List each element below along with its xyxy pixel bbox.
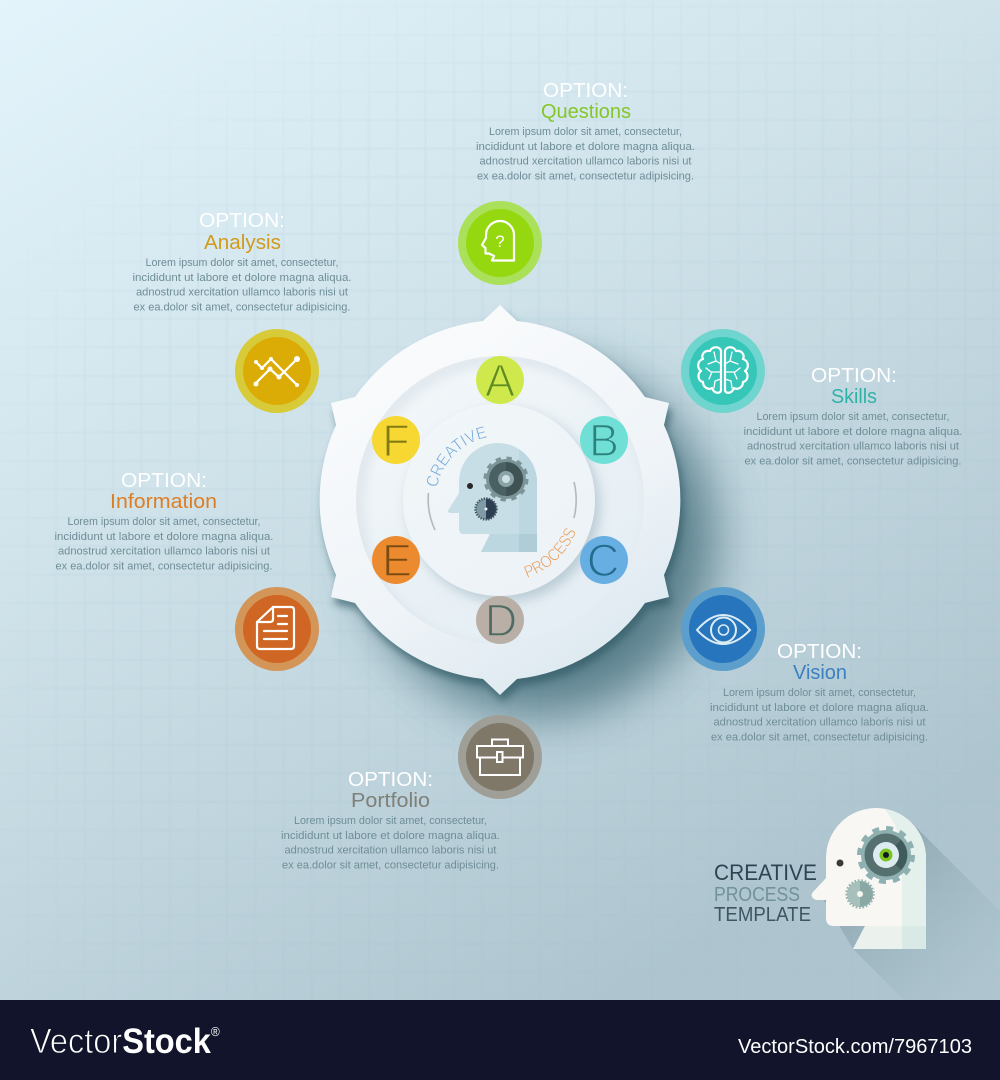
heading [541,80,631,123]
letter D [476,595,524,646]
eye dot [836,860,844,866]
heading [811,365,897,408]
heading [777,641,862,684]
text block: incididunt ut labore et dolore magna aliqua. [710,702,929,714]
icon: eye [681,587,765,671]
letter E: E [382,535,412,586]
heading: OPTION: [777,641,862,663]
heading [348,769,433,812]
heading: OPTION: [121,470,207,492]
letter A: A [485,355,515,406]
letter A [476,355,524,406]
text block: Lorem ipsum dolor sit amet, consectetur, [294,815,487,827]
template title: TEMPLATE [714,904,811,926]
text block: Lorem ipsum dolor sit amet, consectetur, [68,516,260,528]
option: questions [458,80,695,285]
text block: ex ea.dolor sit amet, consectetur adipisicing. [282,860,499,872]
text block: ex ea.dolor sit amet, consectetur adipisicing. [744,456,962,468]
letter F [372,415,420,466]
text block: incididunt ut labore et dolore magna aliqua. [132,272,352,284]
letter C [580,535,628,586]
icon: head with question mark [458,201,542,285]
letter E [372,535,420,586]
heading: Vision [793,662,847,684]
heading: OPTION: [199,210,285,232]
big gear [486,459,526,499]
text block: adnostrud xercitation ullamco laboris nisi ut [136,286,348,298]
head shading [853,808,926,949]
text block: Lorem ipsum dolor sit amet, consectetur, [723,687,916,699]
logo: ® [211,1025,220,1039]
heading: Portfolio [351,790,430,812]
heading: Skills [831,386,877,408]
heading: Analysis [204,232,281,254]
text block [710,687,929,744]
text block [54,516,274,572]
option: skills [681,329,962,468]
text block: adnostrud xercitation ullamco laboris nisi ut [480,156,692,168]
head shape [812,808,926,949]
text block [744,411,962,468]
eye dot [467,483,473,489]
text block: adnostrud xercitation ullamco laboris nisi ut [747,440,959,452]
text block: incididunt ut labore et dolore magna aliqua. [476,141,695,153]
text block: adnostrud xercitation ullamco laboris nisi ut [714,716,926,728]
heading [199,210,285,254]
heading: Information [110,491,217,513]
heading: OPTION: [811,365,897,387]
small gear [476,498,497,520]
heading: Questions [541,101,631,123]
template title: PROCESS [714,884,800,906]
text block [476,126,695,182]
option: vision [681,587,929,744]
letter F: F [382,415,410,466]
small gear [846,880,874,908]
icon: document [235,587,319,671]
curved text: process: PROCESS [524,528,576,578]
letter D: D [485,595,517,646]
text block: incididunt ut labore et dolore magna aliqua. [281,830,500,842]
arc strokes [428,482,576,530]
text block: adnostrud xercitation ullamco laboris nisi ut [58,546,270,558]
heading: OPTION: [348,769,433,791]
text block: ex ea.dolor sit amet, consectetur adipisicing. [56,560,272,572]
letter C: C [587,535,619,586]
heading: OPTION: [543,80,628,102]
text block: Lorem ipsum dolor sit amet, consectetur, [146,257,338,269]
central wheel [316,305,747,746]
heading [110,470,217,513]
letter B: B [589,415,619,466]
middle ring [356,356,644,634]
template title [714,860,817,926]
long shadow [824,823,1000,1000]
text block: adnostrud xercitation ullamco laboris nisi ut [284,844,496,856]
text block: Lorem ipsum dolor sit amet, consectetur, [756,411,950,423]
head illustration [812,808,980,984]
logo: VectorStock [30,1022,211,1061]
big gear with eye [860,829,912,881]
template title: CREATIVE [714,860,817,885]
letter B [580,415,628,466]
icon: briefcase [458,715,542,799]
text block [281,815,500,872]
text block: incididunt ut labore et dolore magna aliqua. [744,426,962,438]
option: portfolio [281,715,542,872]
footer bar [0,1000,1000,1080]
icon: line chart [235,329,319,413]
text block: ex ea.dolor sit amet, consectetur adipisicing. [711,732,928,744]
option: analysis [132,210,352,413]
text block: ex ea.dolor sit amet, consectetur adipisicing. [477,170,694,182]
option: information [54,470,319,671]
text block: ex ea.dolor sit amet, consectetur adipisicing. [134,302,350,314]
inner disc [403,404,600,602]
icon: brain [681,329,765,413]
curved text: creative: CREATIVE [427,426,487,486]
image id: VectorStock.com/7967103 [738,1036,972,1058]
text block: incididunt ut labore et dolore magna aliqua. [54,531,274,543]
outer ring with spikes [320,305,680,695]
icon: head with question mark: ? [495,232,505,251]
mini head icon [448,440,539,555]
wheel shadow [323,312,716,716]
text block: Lorem ipsum dolor sit amet, consectetur, [489,126,682,138]
text block [132,257,352,314]
